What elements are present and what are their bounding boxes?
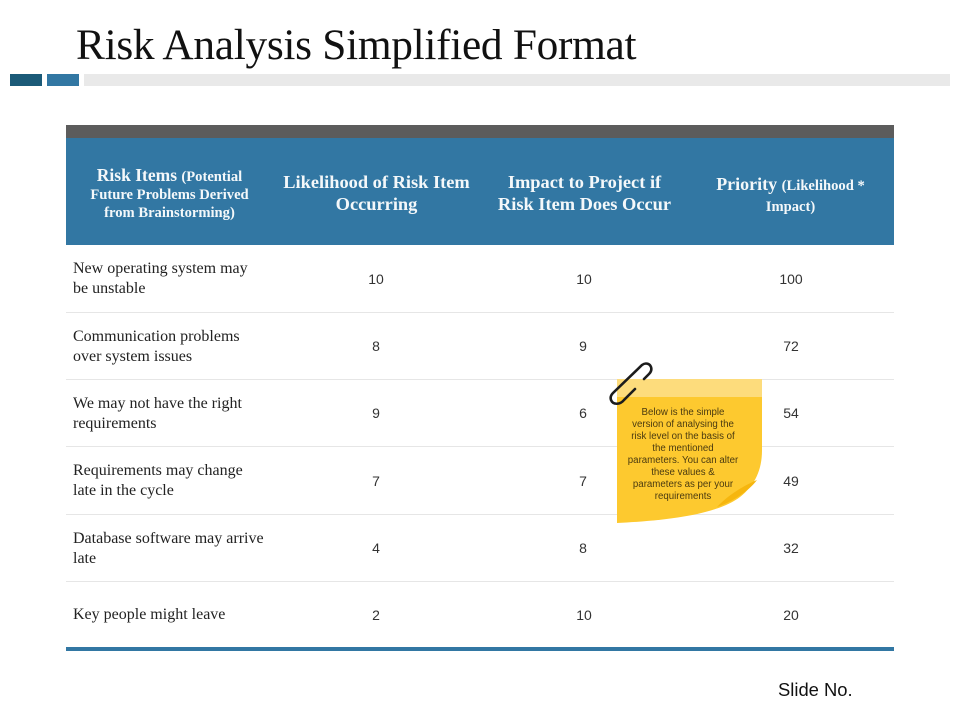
sticky note text: Below is the simple — [642, 407, 724, 418]
sticky note shape and paper clip — [609, 362, 762, 523]
header: impact: Impact to Project if — [508, 172, 661, 192]
row 3 label: requirements — [73, 415, 157, 432]
table bottom rule — [66, 647, 894, 651]
sticky note text: parameters. You can alter — [628, 455, 738, 466]
sticky note text: these values & — [651, 467, 715, 478]
row 6 impact: 10 — [576, 607, 592, 623]
row 2 label — [73, 328, 240, 365]
header: likelihood: Occurring — [336, 194, 417, 214]
header: risk items: Risk Items (Potential — [97, 165, 242, 185]
row 4 label — [73, 462, 243, 499]
row 2 label: Communication problems — [73, 328, 240, 345]
table top band — [66, 125, 894, 138]
header: likelihood — [283, 172, 470, 214]
row 1 label: be unstable — [73, 280, 145, 297]
header: risk items: Future Problems Derived — [90, 187, 249, 203]
row 5 priority: 32 — [783, 540, 799, 556]
title: Risk Analysis Simplified Format — [76, 21, 636, 69]
row 6 label: Key people might leave — [73, 606, 225, 623]
row 4 likelihood: 7 — [372, 473, 380, 489]
header: priority: Impact) — [766, 199, 815, 215]
table header row — [66, 138, 894, 245]
table — [66, 125, 894, 245]
header: priority: Priority (Likelihood * — [716, 174, 865, 194]
slide number: Slide No. — [778, 679, 853, 700]
row 1 priority: 100 — [779, 271, 803, 287]
row 4 priority: 49 — [783, 473, 799, 489]
row 1 label: New operating system may — [73, 260, 248, 277]
row 5 label — [73, 530, 264, 567]
row 2 impact: 9 — [579, 338, 587, 354]
row 6 likelihood: 2 — [372, 607, 380, 623]
header: risk items: from Brainstorming) — [104, 205, 235, 221]
row 3 impact: 6 — [579, 405, 587, 421]
row 5 likelihood: 4 — [372, 540, 380, 556]
sticky note text: parameters as per your — [633, 479, 733, 490]
header: impact: Risk Item Does Occur — [498, 194, 671, 214]
sticky note text — [628, 407, 738, 502]
row 5 impact: 8 — [579, 540, 587, 556]
row 4 label: Requirements may change — [73, 462, 243, 479]
sticky note text: risk level on the basis of — [631, 431, 735, 442]
sticky note text: version of analysing the — [632, 419, 734, 430]
header: likelihood: Likelihood of Risk Item — [283, 172, 470, 192]
row 1 impact: 10 — [576, 271, 592, 287]
row 4 impact: 7 — [579, 473, 587, 489]
row 4 label: late in the cycle — [73, 482, 174, 499]
row 2 likelihood: 8 — [372, 338, 380, 354]
header: risk items — [90, 165, 249, 221]
row 6 priority: 20 — [783, 607, 799, 623]
row 3 likelihood: 9 — [372, 405, 380, 421]
header: impact — [498, 172, 671, 214]
header: priority — [716, 174, 865, 215]
row 1 label — [73, 260, 248, 297]
sticky note text: requirements — [655, 491, 711, 502]
row 3 label: We may not have the right — [73, 395, 242, 412]
row 2 priority: 72 — [783, 338, 799, 354]
row 3 priority: 54 — [783, 405, 799, 421]
row 1 likelihood: 10 — [368, 271, 384, 287]
row 5 label: Database software may arrive — [73, 530, 264, 547]
sticky note text: the mentioned — [652, 443, 714, 454]
sticky note callout — [609, 362, 762, 523]
row 3 label — [73, 395, 242, 432]
row 2 label: over system issues — [73, 348, 192, 365]
title accent bar — [10, 74, 950, 86]
row 5 label: late — [73, 550, 96, 567]
